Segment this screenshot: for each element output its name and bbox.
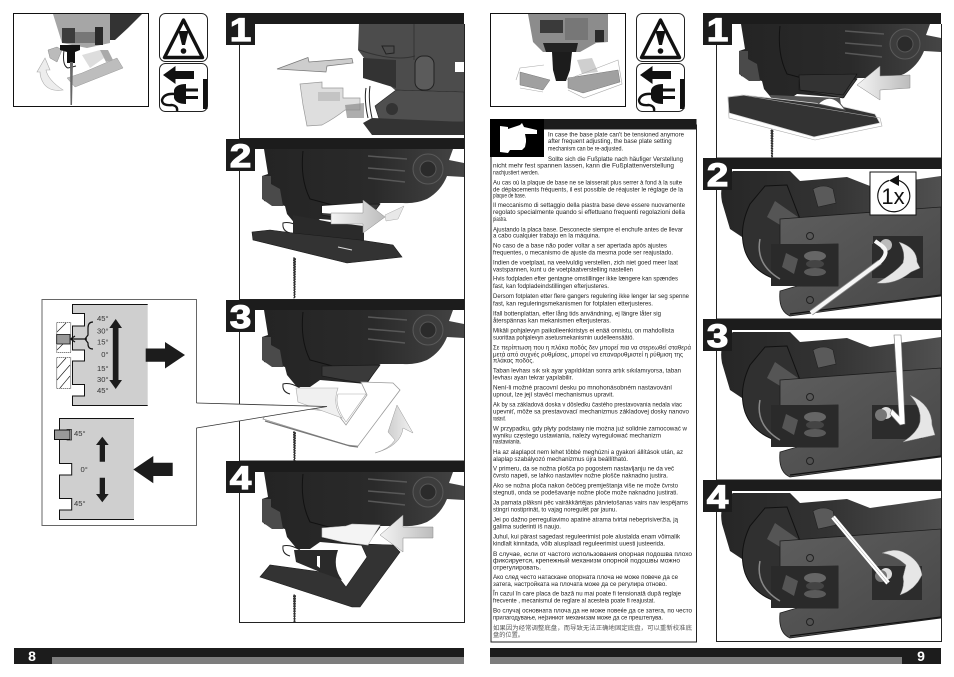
note text: nachjustiert werden. xyxy=(493,169,539,176)
angle labels lower xyxy=(74,429,88,508)
right panel 3 illustration xyxy=(721,332,941,477)
panel: top-left photo xyxy=(14,14,148,106)
step bar 1 right: 1 xyxy=(707,13,728,48)
note text: Ако след често натаскане опорната плоча не може повече да се xyxy=(493,574,679,581)
panel 2 illustration xyxy=(252,149,464,298)
step bar 4 right: 4 xyxy=(707,480,729,515)
panel 3 illustration xyxy=(262,310,464,461)
note text: nastaviť. xyxy=(493,416,506,423)
right panel 4 illustration xyxy=(721,493,941,638)
note text: suorittaa pohjalevyn asetusmekanismin uudelleensäätö. xyxy=(493,334,634,341)
note text: Во случај основната плоча да не може повеќе да се затега, по често xyxy=(493,607,693,614)
note text: a cabo cualquier trabajo en la máquina. xyxy=(493,233,600,240)
note text: after frequent adjusting, the base plate setting xyxy=(548,138,672,145)
note text: Dersom fotplaten etter flere gangers regulering ikke lenger lar seg spenne xyxy=(493,293,690,300)
note text: nastawiania. xyxy=(493,439,521,446)
note text: Juhul, kui pärast sagedast reguleerimist pole alustalda enam võimalik xyxy=(493,533,681,540)
lower notched scale xyxy=(54,418,134,520)
icon: rotate once: 1x xyxy=(881,184,905,209)
note text: frecvente , mecanismul de reglare al acesteia poate fi reajustat. xyxy=(493,598,655,605)
note text: Mikäli pohjalevyn paikolleenkiristys ei enää onnistu, on mahdollista xyxy=(493,327,675,334)
brace and pointer xyxy=(70,322,93,349)
note text: 如果因为经常调整底盘，而导致无法正确地固定底盘，可以重新校准底 xyxy=(493,624,692,632)
note text: mechanism can be re-adjusted. xyxy=(548,145,623,152)
footer left with page number: 8 xyxy=(28,648,36,664)
note text: Ifall bottenplattan, efter lång tids användning, ej längre låter sig xyxy=(493,311,661,318)
note text: W przypadku, gdy płyty podstawy nie można już solidnie zamocować w xyxy=(493,425,688,432)
icon: unplug xyxy=(636,64,684,112)
angle labels lower: 0° xyxy=(80,465,88,474)
note text: återspännas kan mekanismen efterjusteras. xyxy=(493,318,611,325)
step bar 2 left: 2 xyxy=(230,139,251,174)
up and down arrows xyxy=(96,437,109,502)
note text: Není-li možné pracovní desku po mnohonásobném nastavování xyxy=(493,384,672,391)
icon: warning triangle xyxy=(160,14,208,62)
note text: μετά από συχνές ρυθμίσεις, μπορεί να επαναρυθμιστεί η ρύθμιση της xyxy=(493,351,683,358)
note text: čvrsto napeti, se lahko nastavitev nožne plošče naknadno justira. xyxy=(493,472,668,479)
step bar 2 right: 2 xyxy=(707,158,728,193)
note text: kindlalt kinnitada, võib alusplaadi reguleerimist uuesti justeerida. xyxy=(493,540,665,547)
note text: fast, kan reguleringsmekanismen for fotplaten etterjusteres. xyxy=(493,301,653,308)
note text: nicht mehr fest spannen lassen, kann die Fußplattenverstellung xyxy=(493,163,674,170)
note text: фиксируется, крепежный механизм опорной подошвы можно xyxy=(493,558,681,565)
step bar 2 right xyxy=(703,158,941,193)
angle labels upper xyxy=(97,314,108,395)
panel: top-right photo xyxy=(490,14,626,106)
note text: В случае, если от частого использования опорная подошва плохо xyxy=(493,551,693,558)
note text: Ajustando la placa base. Desconecte siempre el enchufe antes de llevar xyxy=(493,226,683,233)
step bar 1 left xyxy=(226,13,464,48)
footer right with page number: 9 xyxy=(917,648,925,664)
angle labels upper: 45° xyxy=(97,314,108,323)
note text: Ako se nožna ploča nakon čeöćeg premještanja više ne može čvrsto xyxy=(493,483,679,490)
step bar 3 left: 3 xyxy=(230,300,251,335)
icon: warning triangle xyxy=(636,14,684,62)
angle labels upper: 15° xyxy=(97,338,108,346)
panel 1 illustration xyxy=(277,23,464,135)
double arrow xyxy=(109,319,122,389)
note text: Hvis fodpladen efter gentagne omstillinger ikke længere kan spændes xyxy=(493,276,678,283)
step bar 4 left xyxy=(226,461,464,496)
step bar 1 right xyxy=(703,13,941,48)
note text: Il meccanismo di settaggio della piastra base deve essere nuovamente xyxy=(493,202,686,209)
icon: pointing hand xyxy=(490,119,544,157)
angle labels upper: 30° xyxy=(97,375,108,384)
note text xyxy=(492,132,693,639)
note text: Sollte sich die Fußplatte nach häufiger Verstellung xyxy=(548,156,683,163)
note text: stegnuti, onda se podešavanje nožne ploče može naknadno justirati. xyxy=(493,490,678,497)
footer left with page number xyxy=(14,648,464,664)
panel: angle diagrams xyxy=(42,300,327,526)
note text: Σε περίπτωση που η πλάκα ποδός δεν μπορεί πια να στερεωθεί σταθερά xyxy=(493,344,691,351)
hatched slots xyxy=(57,322,71,388)
note text: Ja pamata plāksni pēc vairākkārtējas pārvietošanas vairs nav iespējams xyxy=(493,500,688,507)
note text: de déplacements fréquents, il est possible de réajuster le réglage de la xyxy=(493,186,684,193)
step bar 3 right xyxy=(703,319,941,354)
panel 4 illustration xyxy=(260,472,464,622)
note text: fast, kan fodpladeindstillingen efterjusteres. xyxy=(493,283,609,290)
frames of left page panels xyxy=(240,24,464,622)
note text: piastra. xyxy=(493,216,507,223)
note text: upnout, lze její stavěcí mechanismus upravit. xyxy=(493,392,614,399)
step bar 4 left: 4 xyxy=(230,461,252,496)
step bar 2 left xyxy=(226,139,464,174)
note text: 盘的位置。 xyxy=(493,631,524,639)
footer right with page number xyxy=(490,648,941,664)
icon: unplug xyxy=(160,64,208,112)
note text: πλάκας ποδός. xyxy=(493,358,534,365)
note text: No caso de a base não poder voltar a ser apertada após ajustes xyxy=(493,243,667,250)
note text: отрегулировать. xyxy=(493,564,541,571)
step bar 4 right xyxy=(703,480,941,515)
step bar 3 right: 3 xyxy=(707,319,728,354)
note text: затега, настройката на плочата може да се регулира отново. xyxy=(493,581,667,588)
note text: V primeru, da se nožna plošča po pogostem nastavljanju ne da več xyxy=(493,466,674,473)
frames of right page panels xyxy=(716,24,942,642)
angle labels upper: 15° xyxy=(97,364,108,373)
note text: Ak by sa základová doska v dôsledku častého prestavovania nedala viac xyxy=(493,401,682,408)
note text: vastspannen, kunt u de voetplaatverstelling nastellen xyxy=(493,266,633,273)
big right arrow xyxy=(146,342,185,368)
big left arrow xyxy=(133,456,173,483)
angle labels upper: 45° xyxy=(97,386,108,395)
upper notched scale xyxy=(72,304,148,406)
note text: frequentes, o mecanismo de ajuste da mesma pode ser reajustado. xyxy=(493,250,673,257)
note text: upevniť, môže sa prestavovací mechanizmus základovej dosky nanovo xyxy=(493,409,690,416)
step bar 1 left: 1 xyxy=(230,13,251,48)
panel: multilingual note xyxy=(490,119,696,642)
right panel 1 illustration xyxy=(728,24,941,158)
note text: plaque de base. xyxy=(493,192,526,199)
step bar 3 left xyxy=(226,300,464,335)
note text: wyniku częstego ustawiania, należy wyregulować mechanizm xyxy=(492,433,661,440)
note text: Ha az alaplapot nem lehet többé meghúzni a gyakori állítások után, az xyxy=(493,449,683,456)
note text: In case the base plate can't be tensioned anymore xyxy=(548,132,685,138)
note text: galima suderinti iš naujo. xyxy=(493,524,561,531)
angle labels upper: 30° xyxy=(97,326,108,336)
right panel 2 illustration xyxy=(721,171,941,316)
angle labels lower: 45° xyxy=(74,499,85,508)
note text: прилагодување, нејзиниот механизам може да се прештелува. xyxy=(493,614,663,621)
note text: Jei po dažno perreguliavimo apatinė atrama tvirtai nebeprisiveržia, ją xyxy=(493,517,679,524)
angle labels lower: 45° xyxy=(74,429,85,438)
note text: regolato specialmente quando si effettuano frequenti regolazioni della xyxy=(493,209,686,216)
note text: stingri nostiprināt, to vajag noregulēt par jaunu. xyxy=(493,507,617,514)
note text: Au cas où la plaque de base ne se laisserait plus serrer à fond à la suite xyxy=(493,180,683,187)
note text: Taban levhası sık sık ayar yapıldıktan sonra artık sıkılamıyorsa, taban xyxy=(493,367,681,374)
note text: alaplap szabályozó mechanizmus újra beállítható. xyxy=(493,456,628,463)
icon: rotate once xyxy=(870,172,916,215)
note text: În cazul în care placa de bază nu mai poate fi tensionată după reglaje xyxy=(492,591,682,598)
angle labels upper: 0° xyxy=(101,350,108,359)
note text: levhası ayarı tekrar yapılabilir. xyxy=(493,374,573,381)
note text: Indien de voetplaat, na veelvuldig verstellen, zich niet goed meer laat xyxy=(493,260,678,267)
